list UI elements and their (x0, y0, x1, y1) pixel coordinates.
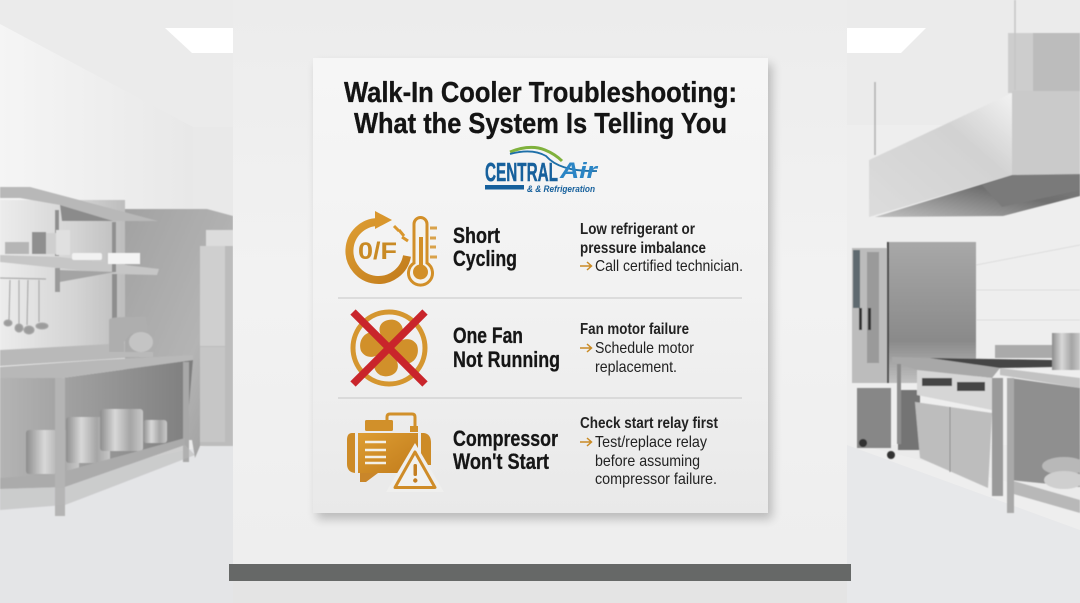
icon: cycle arrow and thermometer: 0/F (358, 238, 397, 265)
title (344, 77, 737, 140)
text: compressor diagnosis: Test/replace relay (595, 434, 707, 451)
shelf jars and plates (5, 230, 140, 264)
heading: short cycling (453, 223, 517, 271)
row: compressor won't start (347, 414, 719, 492)
text: short cycling diagnosis: pressure imbalance (580, 240, 706, 257)
title: Walk-In Cooler Troubleshooting: (344, 77, 737, 109)
icon: compressor with warning (347, 414, 444, 492)
right prep table and pots (995, 333, 1080, 513)
row: short cycling (349, 211, 743, 285)
table backsplash and under-table wall (0, 344, 193, 482)
heading: compressor won't start (453, 426, 558, 474)
heading: compressor won't start: Won't Start (453, 449, 550, 474)
row: one fan not running (353, 312, 695, 384)
heading: short cycling: Short (453, 223, 501, 248)
panel: troubleshooting sign (313, 58, 768, 513)
lower shelf and front leg (0, 378, 185, 516)
left kitchen equipment (0, 187, 233, 516)
left back wall (193, 127, 233, 217)
right ceiling (847, 0, 1080, 125)
heading: one fan not running: One Fan (453, 323, 523, 348)
floor strip under wall (233, 581, 847, 603)
heading: one fan not running (453, 323, 560, 372)
center feature wall (233, 0, 847, 565)
wall tile lines (976, 245, 1080, 320)
heading: short cycling: Cycling (453, 246, 517, 271)
oven rack stand (857, 388, 920, 459)
text: short cycling diagnosis: Low refrigerant or (580, 221, 695, 238)
text: fan diagnosis: Schedule motor (595, 340, 695, 357)
combi oven (852, 242, 976, 383)
right floor (847, 445, 1080, 603)
stand mixer (109, 317, 153, 357)
panel shadow (317, 64, 772, 519)
icon: crossed out fan (353, 312, 425, 384)
left wall (0, 24, 193, 360)
upright refrigerator (125, 209, 233, 458)
right kitchen equipment (852, 0, 1080, 513)
baseboard (229, 564, 851, 581)
work table (0, 355, 193, 462)
floor shadow under table (0, 445, 195, 510)
icon: cycle arrow and thermometer (349, 211, 437, 285)
range cooktop (892, 357, 1053, 496)
heading: one fan not running: Not Running (453, 347, 560, 372)
text: compressor diagnosis: before assuming (595, 453, 700, 470)
text: fan diagnosis: Fan motor failure (580, 321, 689, 338)
logo: Central Air & Refrigeration: & & Refrigeration (527, 184, 595, 195)
right wall (847, 125, 1080, 445)
left floor (0, 440, 233, 603)
text: short cycling diagnosis (580, 221, 743, 275)
text: fan diagnosis (580, 321, 695, 376)
left ceiling (0, 0, 233, 127)
logo: Central Air & Refrigeration: CENTRAL (485, 157, 558, 187)
logo: Central Air & Refrigeration: Air (559, 158, 599, 183)
text: compressor diagnosis (580, 415, 719, 488)
left ceiling light (165, 28, 233, 53)
warning triangle (386, 443, 444, 492)
backsplash wall (0, 200, 125, 350)
right ceiling light (847, 28, 926, 53)
text: short cycling diagnosis: Call certified technician. (595, 258, 743, 275)
logo: Central Air & Refrigeration (485, 147, 599, 195)
exhaust hood (869, 0, 1080, 217)
title: What the System Is Telling You (354, 108, 727, 140)
heading: compressor won't start: Compressor (453, 426, 558, 451)
text: fan diagnosis: replacement. (595, 359, 677, 376)
text: compressor diagnosis: compressor failure. (595, 471, 717, 488)
wall shelves (0, 187, 159, 324)
stock pots (26, 409, 167, 474)
hanging utensils (0, 278, 48, 334)
text: compressor diagnosis: Check start relay first (580, 415, 719, 432)
